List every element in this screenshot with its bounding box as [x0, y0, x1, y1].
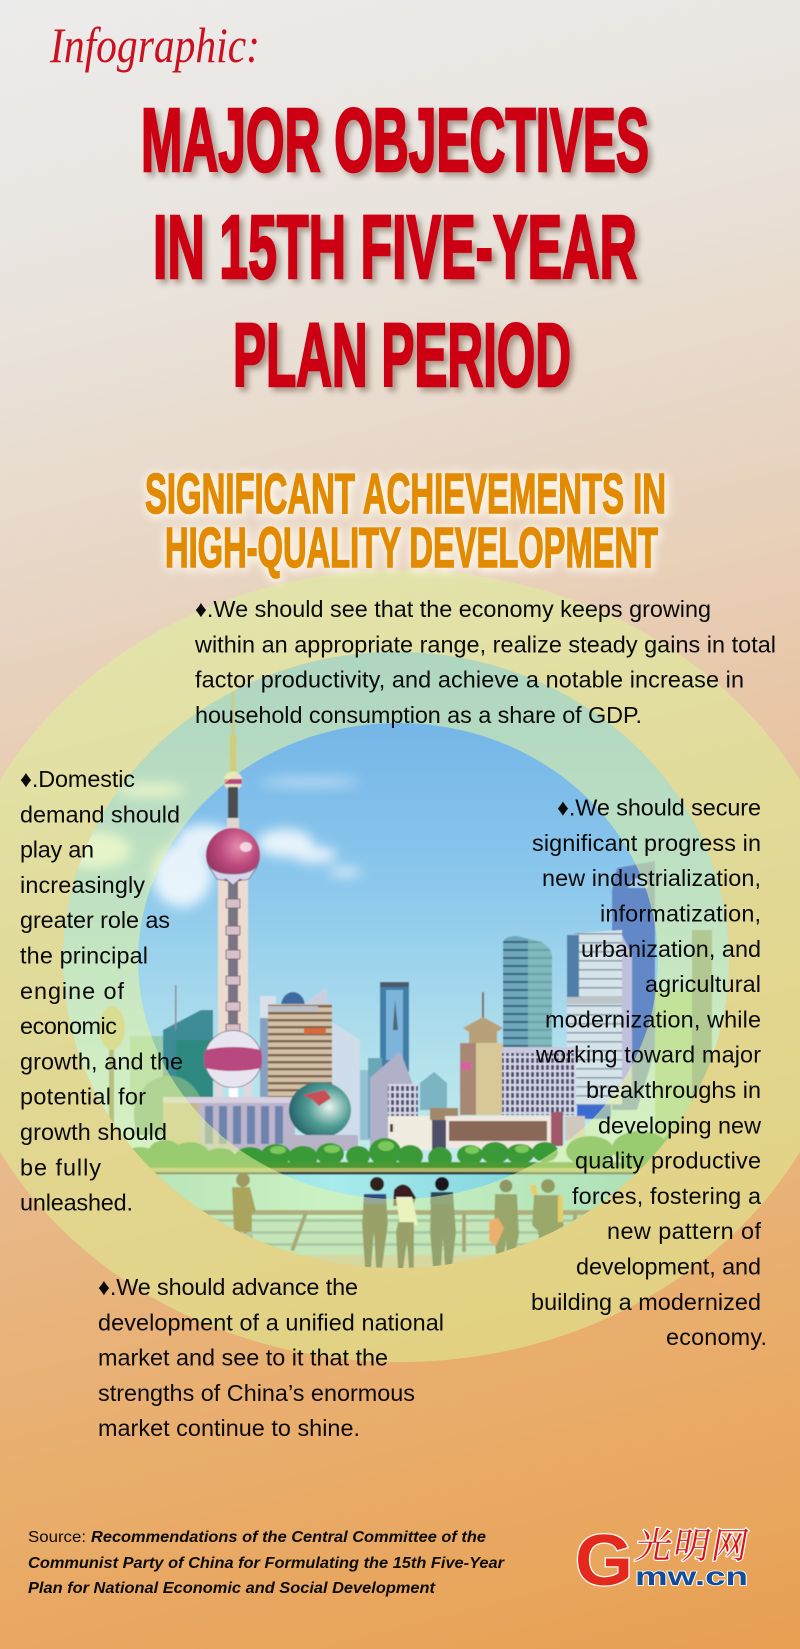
middle ring overlay	[63, 652, 729, 1268]
source note: Source:	[28, 1529, 86, 1546]
text block: right objective: working toward major	[535, 1042, 761, 1068]
text block: left objective: greater role as	[20, 907, 170, 933]
left teal buildings	[130, 1036, 164, 1106]
tall blue building	[380, 982, 409, 1072]
tower shaft columns	[228, 881, 238, 1024]
text block: right objective: developing new	[598, 1112, 761, 1138]
text block: bottom objective	[98, 1274, 444, 1441]
text block: left objective: the principal	[20, 942, 148, 968]
text block: top objective	[194, 596, 776, 728]
lilac base hall	[198, 1102, 296, 1152]
pyramid grey building	[370, 1052, 413, 1147]
people	[232, 1173, 564, 1270]
person 3	[430, 1177, 456, 1268]
text block: left objective: engine of	[20, 978, 124, 1004]
text block: right objective: ♦.We should secure	[557, 795, 761, 821]
text block: left objective: economic	[20, 1013, 117, 1039]
person 2	[393, 1184, 418, 1270]
logo: Guangming: 光明网	[632, 1517, 753, 1569]
text block: left objective: unleashed.	[20, 1190, 133, 1216]
source note	[28, 1529, 505, 1597]
globe building	[289, 1082, 351, 1138]
water	[156, 1174, 636, 1218]
teal block near pyramid	[368, 1058, 382, 1138]
tower spire	[231, 687, 235, 737]
text block: left objective: potential for	[20, 1084, 146, 1110]
main title	[141, 91, 649, 406]
source note: Communist Party of China for Formulating the 15th Five-Year	[28, 1555, 505, 1572]
text block: right objective: breakthroughs in	[586, 1077, 761, 1103]
text block: right objective: new pattern of	[607, 1218, 762, 1244]
illustration: Shanghai skyline in concentric ellipses	[59, 650, 740, 1278]
text block: right objective: agricultural	[645, 971, 761, 997]
text block: left objective: increasingly	[20, 872, 145, 898]
logo: Guangming: mw.cn	[635, 1561, 748, 1591]
upper pink sphere	[206, 828, 260, 882]
right white-blue tower	[332, 1022, 360, 1140]
subtitle	[145, 462, 666, 580]
text block: bottom objective: strengths of China’s enormous	[98, 1380, 415, 1406]
white block	[388, 1116, 433, 1150]
person 1	[362, 1177, 388, 1268]
low brown hall	[445, 1116, 551, 1148]
embankment	[214, 1218, 578, 1256]
logo: Guangming	[575, 1517, 753, 1601]
text block: bottom objective: development of a unified national	[98, 1309, 444, 1335]
text block: top objective: factor productivity, and achieve a notable increase in	[195, 667, 744, 693]
lower sphere	[214, 1082, 224, 1098]
text block: right objective: building a modernized	[531, 1289, 761, 1315]
trees	[132, 1130, 672, 1163]
text block: right objective: modernization, while	[545, 1006, 761, 1032]
source note: Plan for National Economic and Social Development	[28, 1580, 436, 1597]
text block: right objective: informatization,	[600, 900, 761, 926]
tan pagoda tower	[482, 992, 484, 1018]
text block: top objective: ♦.We should see that the economy keeps growing	[195, 596, 711, 622]
small teal tower	[420, 1072, 447, 1110]
text block: left objective: growth should	[20, 1119, 167, 1145]
beige tall building with dome	[281, 992, 305, 1006]
green-blue tower	[503, 936, 552, 1050]
text block: left objective: growth, and the	[20, 1048, 183, 1074]
white office block	[502, 1047, 576, 1115]
text block: left objective: demand should	[20, 801, 180, 827]
person 4 with red bag	[489, 1180, 519, 1266]
text block: right objective: urbanization, and	[581, 936, 761, 962]
text block: left objective: play an	[20, 837, 94, 863]
text block: right objective	[531, 795, 767, 1350]
text block: right objective: economy.	[666, 1324, 767, 1350]
text block: bottom objective: market and see to it that the	[98, 1345, 388, 1371]
text block: right objective: forces, fostering a	[572, 1183, 762, 1209]
text block: right objective: significant progress in	[532, 830, 761, 856]
person with brown coat	[232, 1173, 256, 1238]
blue roof block	[577, 1105, 611, 1119]
source note: Recommendations of the Central Committee of the	[91, 1529, 486, 1546]
logo: Guangming: G	[575, 1521, 633, 1601]
text block: left objective: be fully	[20, 1154, 101, 1180]
far right faded buildings	[655, 990, 693, 1140]
lamp post	[99, 1006, 125, 1140]
grey stepped tower	[567, 930, 622, 1105]
text block: bottom objective: ♦.We should advance the	[98, 1274, 358, 1300]
sky	[60, 650, 740, 1170]
infographic label: Infographic:	[49, 17, 260, 73]
tower upper shaft	[228, 787, 238, 820]
clouds	[59, 778, 361, 907]
text block: left objective	[20, 766, 183, 1216]
text block: right objective: quality productive	[575, 1148, 761, 1174]
text block: bottom objective: market continue to shine.	[98, 1415, 360, 1441]
text block: top objective: household consumption as a share of GDP.	[195, 702, 642, 728]
person 5 with backpack	[530, 1178, 564, 1238]
outer yellow ellipse	[0, 570, 800, 1362]
text block: right objective: development, and	[576, 1254, 761, 1280]
left glass dome	[134, 1076, 203, 1135]
SWFC blue tower	[612, 861, 655, 1110]
text block: right objective: new industrialization,	[542, 865, 761, 891]
text block: left objective: ♦.Domestic	[20, 766, 135, 792]
text block: top objective: within an appropriate range, realize steady gains in total	[194, 631, 776, 657]
